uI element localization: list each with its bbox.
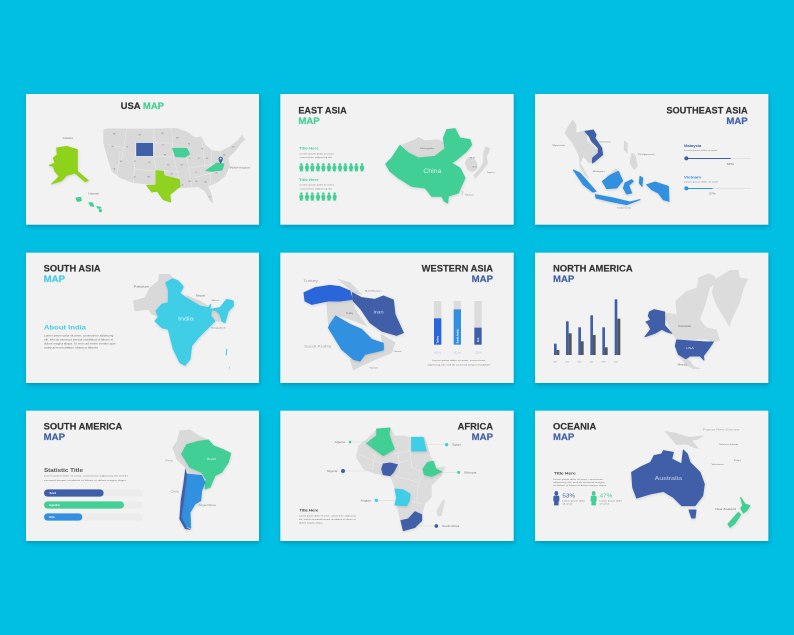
labels	[678, 324, 694, 366]
stat: Vietnam slider: Lorem ipsum dolor sit amet	[684, 181, 719, 184]
text block: first stat: Lorem ipsum dolor sit amet	[300, 152, 334, 155]
map: Hawaii	[76, 197, 102, 212]
labels: Indonesia	[617, 207, 633, 209]
bar chart: Saudi Arabia	[456, 328, 459, 343]
map: Chile	[179, 468, 191, 530]
labels: Argentina	[198, 503, 216, 507]
text block: chart caption	[427, 359, 491, 366]
stat: Malaysia slider: Malaysia	[684, 144, 702, 148]
panel: South America	[26, 411, 259, 541]
heading: SOUTH AMERICA	[44, 422, 123, 432]
labels: state abbreviations: GA	[204, 181, 207, 184]
labels: Oman	[393, 351, 401, 353]
bar chart: 2017	[590, 361, 593, 363]
heading: EAST ASIA	[298, 105, 347, 115]
text block: Title Here: Title Here	[554, 472, 576, 476]
labels: state abbreviations: CA	[113, 167, 116, 170]
bar chart: Iran	[478, 337, 480, 342]
panel: Oceania: MAP	[553, 432, 574, 442]
text block: Title Here: Title Here	[299, 509, 319, 513]
labels: state abbreviations: NC	[215, 173, 219, 175]
stat: Malaysia slider: 68%	[727, 162, 735, 166]
text block: Title Here: elit, sed do eiusmod tempor incididunt ut labore et	[299, 518, 356, 521]
text block: second stat: consectetur adipiscing elit	[300, 187, 332, 190]
bar chart: horizontal: Brazil	[50, 493, 56, 495]
labels: Japan	[486, 172, 495, 174]
labels: Iraq	[346, 311, 353, 315]
text block: Title Here: incididunt ut labore et dolore magna aliqua	[553, 484, 608, 487]
bar chart: 32%	[475, 351, 482, 355]
map: small islands	[226, 349, 230, 370]
labels: Taiwan	[464, 195, 474, 197]
map: Brazil	[182, 440, 231, 489]
panel: North America: MAP	[553, 274, 574, 284]
labels: Canada	[678, 324, 692, 328]
bar chart: 81%	[454, 351, 461, 355]
stat: Malaysia slider	[684, 144, 751, 166]
labels: Solomon Islands	[719, 444, 738, 446]
state: Texas	[147, 171, 180, 202]
stat: Malaysia slider: Lorem ipsum dolor sit amet	[684, 149, 718, 152]
labels: state abbreviations: AL	[196, 180, 198, 183]
map: China	[386, 129, 472, 203]
labels: Bhut	[212, 299, 219, 302]
label: Washington: Washington	[230, 165, 251, 169]
labels: N.K	[470, 158, 476, 160]
labels: state abbreviations: ID	[127, 147, 129, 149]
panel: South America: MAP	[44, 432, 65, 442]
labels: state abbreviations: MS	[188, 181, 192, 183]
labels: Peru	[165, 459, 173, 463]
bar chart: horizontal	[44, 489, 143, 521]
labels: state abbreviations: NY	[232, 146, 235, 148]
text block: Statistic Title: Statistic Title	[44, 468, 83, 474]
panel: Africa: MAP	[472, 432, 493, 442]
labels: state abbreviations: MT	[139, 135, 141, 137]
label: Hawaii: Hawaii	[88, 192, 100, 196]
text block: Title Here	[299, 509, 356, 524]
heading: SOUTHEAST ASIA	[666, 105, 748, 115]
text block: Title Here: Lorem ipsum dolor sit amet, consectetur	[553, 478, 603, 481]
labels: state abbreviations: ND	[161, 133, 165, 135]
labels: state abbreviations: IN	[198, 158, 200, 160]
stat: 47 percent	[591, 491, 622, 506]
labels	[420, 148, 495, 197]
labels: state abbreviations: NM	[147, 176, 151, 178]
map: Papua New Guinea	[665, 431, 703, 448]
panel: East Asia	[280, 94, 514, 225]
panel: Southeast Asia: MAP	[726, 116, 748, 126]
labels: Pakistan	[134, 286, 150, 289]
icon: location pin	[218, 157, 223, 164]
map: Saudi Arabia	[328, 316, 383, 361]
labels: state abbreviations: WA	[113, 133, 116, 136]
text block: Statistic Title: eiusmod tempor incididunt ut labore et dolore magna aliqua	[44, 479, 127, 482]
map: Egypt	[411, 437, 427, 451]
labels: Australia	[655, 476, 683, 482]
labels: Philippines	[638, 154, 655, 156]
panel: Oceania	[535, 411, 768, 541]
labels: South Africa	[442, 525, 460, 528]
text block: first stat: consectetur adipiscing elit	[300, 156, 332, 159]
map: Vietnam	[585, 130, 603, 163]
map: Canada and Greenland	[665, 270, 748, 343]
text block: About India	[44, 324, 116, 350]
labels: state abbreviations: CO	[148, 162, 151, 164]
map: USA and Alaska	[645, 310, 713, 360]
labels	[655, 427, 742, 511]
text block: second stat	[299, 178, 334, 190]
labels: Ethiopia	[464, 471, 477, 474]
labels: state abbreviations: AZ	[134, 175, 136, 178]
labels	[552, 140, 655, 209]
panel: USA map	[26, 94, 259, 225]
panel: North America	[535, 253, 768, 383]
labels: Mongolia	[420, 148, 436, 150]
stat: 53 percent: sit amet	[562, 503, 573, 506]
stat: 47 percent: Lorem ipsum dolor	[599, 500, 622, 503]
bar chart	[553, 299, 620, 363]
bar chart: 2015	[565, 361, 569, 363]
stat: 47 percent: sit amet	[599, 503, 610, 506]
labels: state abbreviations: KY	[196, 172, 199, 174]
labels: state abbreviations: UT	[134, 161, 136, 163]
labels: Azerbaijan	[365, 289, 382, 292]
map: Australia	[632, 450, 704, 518]
labels: state abbreviations: MI	[201, 149, 204, 151]
heading: AFRICA	[458, 422, 494, 432]
text block: second stat: Lorem ipsum dolor sit amet	[300, 184, 334, 187]
labels: state abbreviations: IL	[189, 158, 191, 160]
labels: Brazil	[207, 457, 217, 461]
map: Indonesia	[573, 170, 669, 205]
labels: state abbreviations: NV	[120, 161, 123, 163]
labels: Malaysia	[593, 171, 606, 173]
labels: Iran	[373, 310, 384, 315]
label: Alaska: Alaska	[63, 136, 74, 140]
map: Alaska	[49, 146, 88, 184]
panel: South Asia: MAP	[44, 274, 65, 284]
labels: Algeria	[335, 441, 346, 444]
bar chart: 2016	[578, 361, 581, 363]
stat: 53 percent	[553, 491, 585, 506]
text block: Title Here: dolore magna aliqua	[299, 521, 323, 524]
map: Ethiopia	[423, 461, 442, 476]
bar chart: 2018	[602, 361, 605, 363]
labels: Myanmar	[552, 144, 566, 147]
labels	[327, 441, 477, 528]
map: South Africa	[401, 512, 422, 531]
text block: Title Here: Lorem ipsum dolor sit amet, consectetur adipiscing	[299, 515, 356, 518]
labels: state abbreviations: KS	[167, 164, 170, 166]
bar chart: 60%	[434, 351, 441, 355]
map: Argentina	[181, 474, 205, 528]
panel: Southeast Asia	[535, 94, 768, 225]
map: continent	[356, 428, 446, 531]
callouts with dots	[343, 442, 459, 526]
text block: About India: Lorem ipsum dolor sit amet, consectetur adipiscing	[44, 335, 114, 338]
labels: S.K	[472, 166, 478, 168]
stat: Vietnam slider	[684, 175, 751, 196]
stat: 53 percent: Lorem ipsum dolor	[562, 500, 585, 503]
heading: SOUTH ASIA	[44, 264, 101, 274]
stat: 53 percent: 53%	[562, 494, 575, 500]
stat: 47 percent: 47%	[600, 494, 612, 500]
labels	[165, 457, 217, 507]
text block: About India: nostrud exercitation ullamco laboris	[44, 347, 99, 350]
map: Algeria	[367, 428, 394, 456]
map: neighbours	[402, 137, 490, 195]
text block: second stat: Title Here	[299, 178, 319, 182]
text block: About India: About India	[44, 324, 86, 331]
state: Iowa	[173, 148, 190, 157]
heading: WESTERN ASIA	[422, 264, 494, 274]
labels: Mexico	[678, 364, 688, 366]
text block: About India: dolore magna aliqua. Ut enim ad minim veniam quis	[44, 343, 116, 346]
labels: state abbreviations: SD	[162, 144, 165, 146]
map: Mexico	[678, 355, 700, 369]
panel: Africa	[280, 411, 514, 541]
text block: Statistic Title	[44, 468, 129, 482]
labels: Egypt	[452, 444, 461, 447]
labels: Chile	[170, 489, 180, 493]
panel: Western Asia	[280, 253, 514, 383]
labels: Angola	[361, 499, 372, 502]
text block: Title Here: adipiscing elit, sed do eiusmod tempor	[553, 481, 605, 484]
stat: Vietnam slider: 37%	[709, 192, 716, 196]
labels	[134, 286, 225, 330]
map: mainland and islands	[565, 120, 637, 181]
labels: India	[178, 316, 194, 322]
heading: OCEANIA	[553, 422, 597, 432]
heading: USA MAP	[121, 101, 164, 111]
text block: About India: elit, sed do eiusmod tempor incididunt ut labore et	[44, 339, 114, 342]
panel: Western Asia: MAP	[472, 274, 493, 284]
map: India	[155, 279, 233, 365]
bar chart: 2019	[614, 361, 618, 363]
labels: Bangladesh	[211, 328, 225, 330]
labels: state abbreviations: WI	[188, 144, 191, 146]
labels: Vanuatu	[711, 463, 724, 466]
labels: state abbreviations: OH	[206, 158, 209, 160]
map: Iran	[352, 293, 403, 335]
labels: Papua New Guinea	[703, 427, 740, 431]
map: contiguous states	[103, 128, 245, 203]
text block: Statistic Title: Lorem ipsum dolor sit amet, consectetur adipiscing elit sed do	[44, 475, 129, 478]
labels: Yemen	[369, 368, 378, 370]
bar chart: horizontal: Chile	[49, 517, 55, 519]
icon row: people	[299, 163, 364, 171]
labels: New Zealand	[715, 507, 737, 511]
labels: USA	[686, 346, 694, 350]
text block: first stat	[299, 147, 334, 159]
state: Wyoming	[136, 143, 153, 156]
labels: state abbreviations: OR	[111, 146, 115, 148]
bar chart: 2014	[553, 361, 557, 363]
text block: first stat: Title Here	[299, 147, 319, 151]
labels: Saudi Arabia	[304, 343, 332, 348]
map: northern countries	[173, 430, 208, 479]
icon row: people	[299, 192, 337, 201]
map: Turkey	[304, 285, 352, 304]
map: neighbours	[133, 274, 220, 322]
labels: Nigeria	[327, 470, 338, 473]
heading: NORTH AMERICA	[553, 264, 633, 274]
labels: state abbreviations: OK	[170, 174, 174, 176]
map: Angola	[395, 489, 410, 506]
map: Nigeria	[382, 463, 397, 476]
map: neighbours	[327, 279, 395, 370]
bar chart: horizontal: Argentina	[49, 504, 61, 507]
labels: state abbreviations: NE	[164, 154, 167, 156]
labels: state abbreviations: MN	[176, 138, 179, 140]
state: Virginia	[206, 163, 224, 171]
bar chart: Turkey	[438, 335, 440, 343]
labels: Vietnam	[599, 140, 612, 143]
text block: chart caption: adipiscing elit, sed do eiusmod tempor incididunt	[427, 363, 491, 366]
labels: China	[423, 169, 442, 175]
labels: state abbreviations	[111, 133, 235, 198]
labels	[303, 278, 401, 370]
labels: state abbreviations: MO	[181, 164, 184, 166]
panel: South Asia	[26, 253, 259, 383]
bar chart	[434, 301, 482, 355]
labels: Nepal	[196, 295, 206, 297]
text block: chart caption: Lorem ipsum dolor sit amet, consectetur	[432, 359, 486, 362]
labels: state abbreviations: PA	[223, 154, 226, 157]
text block: Title Here	[553, 472, 608, 487]
panel: East Asia: MAP	[298, 116, 320, 126]
labels: Fiji	[734, 460, 742, 462]
stat: Vietnam slider: Vietnam	[684, 175, 702, 179]
map: New Zealand	[728, 497, 750, 527]
labels: state abbreviations: FL	[209, 196, 211, 198]
labels: state abbreviations: LA	[181, 183, 184, 186]
labels: Turkey	[303, 278, 318, 283]
